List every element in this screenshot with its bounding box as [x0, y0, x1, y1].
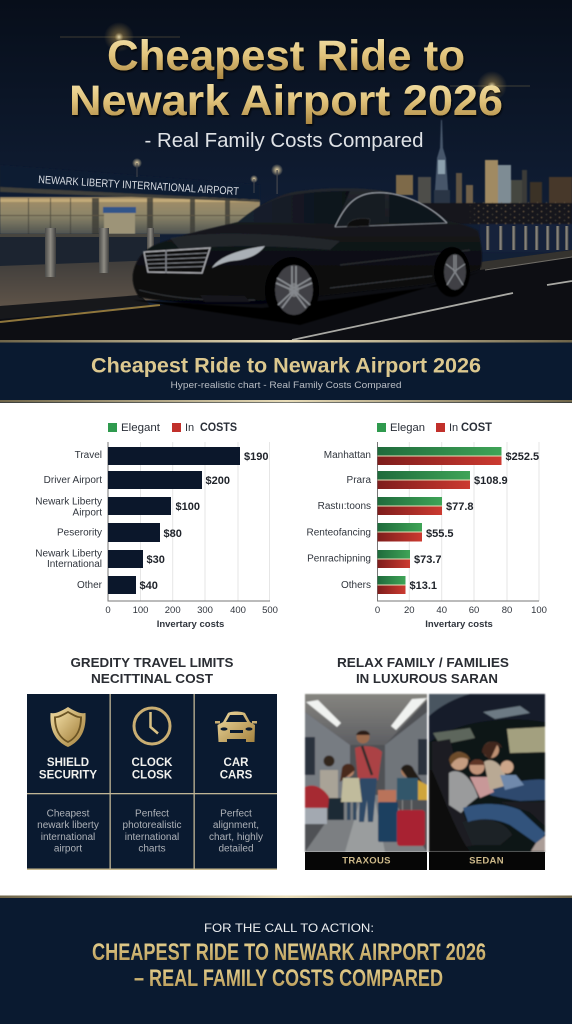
- heading: travel limits: [70, 655, 234, 686]
- bar chart: right: $252.5: [506, 451, 539, 463]
- bar chart: left: $190: [244, 451, 268, 463]
- heading: travel limits: ΝΕCITTINAL COST: [91, 671, 213, 686]
- heading: relax family: RELAX FAMILY / FAMILIES: [337, 655, 509, 670]
- descriptions: detailed: [218, 844, 254, 854]
- panel: white body: [0, 403, 572, 896]
- bar chart: right: 0: [375, 605, 380, 616]
- icon: car: [215, 712, 257, 742]
- bar chart: right: In: [449, 422, 458, 434]
- bar chart: left: COSTS: [200, 422, 237, 434]
- terminal building: [0, 165, 260, 234]
- bar chart: right: Prara: [347, 475, 371, 486]
- airport sign: NEWARK LIBERTY INTERNATIONAL AIRPORT: [38, 174, 239, 198]
- title: [69, 32, 503, 125]
- bar chart: left: Airport: [73, 508, 102, 518]
- cta headline: – REAL FAMILY COSTS COMPARED: [134, 965, 443, 992]
- bar chart: right: 20: [404, 605, 415, 616]
- bar chart: right: COST: [461, 422, 492, 434]
- bar chart: right: Rastıı:toons: [318, 501, 371, 512]
- descriptions: Perfect: [220, 808, 252, 820]
- caption: traxous: [305, 852, 427, 870]
- bar chart: right: $13.1: [410, 580, 437, 592]
- descriptions: Cheapest: [47, 808, 90, 820]
- labels: SECURITY: [39, 770, 97, 782]
- panel: train photo: TRAXOUS: [342, 856, 391, 866]
- bar chart: left: $100: [176, 501, 200, 513]
- bar chart: right: 100: [531, 605, 547, 616]
- cta intro: FOR THE CALL TO ACTION:: [204, 921, 374, 935]
- bar chart: left: International: [47, 559, 102, 570]
- labels: SHIELD: [47, 757, 89, 769]
- bar chart: left: Driver Airport: [44, 475, 102, 486]
- bar chart: right: 60: [469, 605, 479, 616]
- bollards: [45, 226, 568, 277]
- descriptions: photorealistic: [123, 820, 181, 831]
- descriptions: newark liberty: [37, 820, 99, 831]
- descriptions: international: [41, 832, 95, 843]
- bar chart: left: 500: [262, 605, 278, 616]
- bar chart: right: $73.7: [414, 554, 442, 566]
- heading: Cheapest Ride to Newark Airport 2026: [91, 354, 481, 378]
- bar chart: right: Renteofancing: [306, 528, 371, 538]
- heading: relax family: [337, 655, 509, 686]
- bar chart: left: $40: [140, 580, 158, 592]
- bar chart: left: 300: [197, 605, 213, 616]
- labels: CAR: [224, 757, 249, 769]
- lamps: [132, 158, 283, 194]
- panel: call to action footer: [0, 896, 572, 1024]
- bar chart: left: 200: [165, 605, 181, 616]
- sub heading: Hyper-realistic chart - Real Family Costs Compared: [170, 380, 402, 391]
- descriptions: [37, 808, 263, 854]
- bar chart: right: Others: [341, 580, 371, 591]
- subtitle: - Real Family Costs Compared: [144, 130, 424, 152]
- panel: sedan photo: [429, 694, 545, 870]
- labels: CARS: [220, 770, 253, 782]
- skyline: [395, 120, 572, 252]
- bar chart: left: $80: [164, 528, 182, 540]
- ground: [0, 234, 160, 266]
- bar chart: left: 100: [133, 605, 148, 616]
- bar chart: left: [35, 422, 278, 630]
- glints: [60, 22, 530, 101]
- caption: sedan: [429, 852, 545, 870]
- bar chart: left: Travel: [75, 450, 102, 461]
- bar chart: right: $77.8: [446, 501, 474, 513]
- descriptions: international: [125, 832, 179, 843]
- bar chart: left: $200: [206, 475, 230, 487]
- bar chart: left: Invertary costs: [157, 619, 224, 630]
- bar chart: right: Penrachipning: [307, 554, 371, 564]
- bar chart: left: Newark Liberty: [35, 548, 102, 560]
- descriptions: charts: [138, 844, 166, 854]
- descriptions: Penfect: [135, 808, 169, 820]
- bar chart: right: 80: [502, 605, 512, 616]
- bar chart: left: Newark Liberty: [35, 496, 102, 508]
- descriptions: alignment,: [213, 820, 259, 831]
- descriptions: chart, highly: [209, 832, 263, 843]
- title: Cheapest Ride to: [107, 32, 465, 80]
- panel: train photo: [305, 694, 427, 870]
- heading: relax family: IN LUXUROUS SARAN: [356, 671, 498, 686]
- icon: shield: [50, 707, 86, 747]
- bar chart: right: $55.5: [426, 528, 454, 540]
- labels: [39, 757, 253, 782]
- cta headline: [92, 939, 486, 992]
- bar chart: right: $108.9: [474, 475, 508, 487]
- title: Newark Airport 2026: [69, 77, 503, 125]
- bar chart: left: Elegant: [121, 422, 160, 434]
- bar chart: left: 0: [105, 605, 111, 616]
- bar chart: right: Elegan: [390, 422, 425, 434]
- panel: hero photo scene: [0, 0, 572, 341]
- panel: section header band: [0, 340, 572, 403]
- bar chart: right: [306, 422, 547, 630]
- icon: clock: [134, 708, 170, 744]
- labels: CLOCK: [132, 757, 173, 769]
- bar chart: left: Peserority: [57, 528, 102, 538]
- heading: travel limits: GREDITY TRAVEL LIMITS: [70, 655, 234, 670]
- descriptions: airport: [54, 844, 82, 854]
- bar chart: right: 40: [436, 605, 447, 616]
- bar chart: left: Other: [77, 580, 103, 591]
- bar chart: left: $30: [146, 554, 165, 566]
- icon: black sedan: [133, 188, 482, 325]
- bar chart: right: Invertary costs: [425, 619, 493, 630]
- bar chart: right: Manhattan: [324, 450, 371, 461]
- bar chart: left: 400: [230, 605, 246, 616]
- panel: sedan photo: SEDAN: [469, 856, 504, 866]
- bar chart: left: In: [185, 422, 194, 434]
- labels: CLOSK: [132, 770, 173, 782]
- panel: icon table: [27, 694, 277, 870]
